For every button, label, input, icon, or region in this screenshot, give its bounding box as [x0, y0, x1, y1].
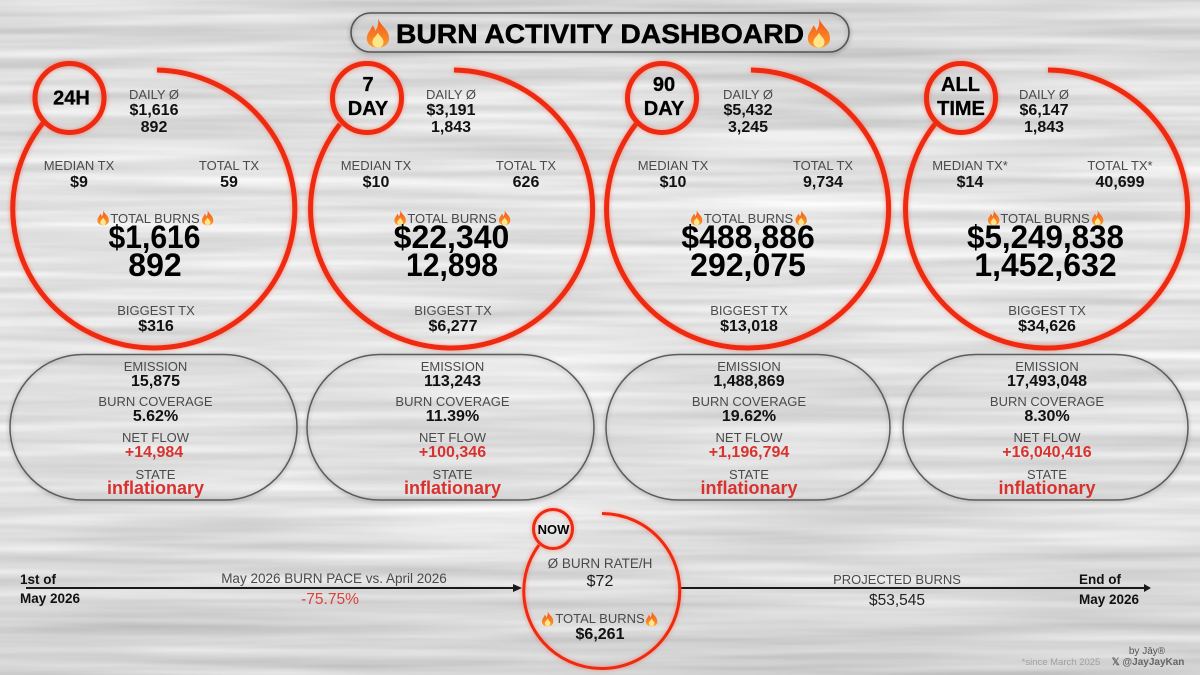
- panel: 90 day supply: 19.62%: [722, 408, 776, 425]
- panel: 90 day supply: EMISSION: [717, 359, 781, 374]
- panel: all time supply: +16,040,416: [1002, 444, 1092, 461]
- stat: biggest tx: $13,018: [720, 318, 778, 335]
- timeline end label: May 2026: [1079, 592, 1140, 607]
- stat: total burns: [394, 210, 510, 283]
- stat: median tx: $10: [363, 174, 389, 191]
- panel: all time burns: [906, 64, 1188, 348]
- credit: [1112, 646, 1184, 668]
- stat: biggest tx: BIGGEST TX: [414, 303, 492, 318]
- stat: daily average: $3,191: [427, 102, 476, 119]
- panel: all time supply: STATE: [1027, 467, 1067, 482]
- timeline end label: [1079, 572, 1140, 607]
- panel: all time supply: 8.30%: [1024, 408, 1070, 425]
- stat: total tx: 9,734: [803, 174, 843, 191]
- stat: total tx: TOTAL TX: [793, 158, 853, 173]
- stat: biggest tx: BIGGEST TX: [117, 303, 195, 318]
- footnote: *since March 2025: [1022, 657, 1100, 668]
- badge: 7 day: [332, 64, 402, 132]
- stat: total burns: $1,616: [108, 219, 200, 255]
- panel: 90 day supply: inflationary: [700, 478, 798, 498]
- panel: all time supply: EMISSION: [1015, 359, 1079, 374]
- timeline start label: [20, 572, 81, 606]
- stat: burn rate: Ø BURN RATE/H: [548, 556, 652, 571]
- stat: daily average: DAILY Ø: [426, 87, 476, 102]
- panel: 24H supply: +14,984: [125, 444, 183, 461]
- badge: 90 day: [628, 64, 696, 132]
- badge: 7 day: DAY: [348, 98, 389, 120]
- badge: 7 day: 7: [362, 74, 374, 96]
- stat: median tx: [44, 158, 115, 191]
- stat: total tx: [496, 158, 556, 191]
- stat: daily average: $1,616: [130, 102, 179, 119]
- stat: total burns: TOTAL BURNS: [1000, 211, 1090, 226]
- burn pace comparison: -75.75%: [301, 591, 359, 608]
- badge: 24H: 24H: [53, 88, 90, 110]
- panel: 90 day supply: 1,488,869: [713, 373, 785, 390]
- stat: daily average: DAILY Ø: [723, 87, 773, 102]
- stat: total burns: 1,452,632: [974, 247, 1117, 283]
- panel: 7 day supply: 11.39%: [426, 408, 479, 425]
- credit: 𝕏 @JayJayKan: [1112, 657, 1184, 668]
- stat: total burns: $5,249,838: [967, 219, 1124, 255]
- stat: total burns: $6,261: [576, 626, 625, 643]
- ring: now: [524, 514, 680, 668]
- stat: daily average: DAILY Ø: [129, 87, 179, 102]
- stat: biggest tx: [117, 303, 195, 335]
- timeline start label: May 2026: [20, 591, 81, 606]
- panel: 24H supply: STATE: [136, 467, 176, 482]
- stat: total burns: [681, 210, 815, 283]
- stat: total tx: [793, 158, 853, 191]
- stat: daily average: $5,432: [724, 102, 773, 119]
- stat: total burns: [97, 210, 213, 283]
- projected burns: [833, 572, 961, 609]
- panel: 7 day supply: 113,243: [424, 373, 481, 390]
- stat: biggest tx: $34,626: [1018, 318, 1076, 335]
- stat: total burns: 892: [128, 247, 182, 283]
- badge: now: [534, 510, 572, 548]
- stat: total burns: [542, 611, 657, 643]
- panel: 90 day supply: NET FLOW: [716, 430, 783, 445]
- burn pace comparison: May 2026 BURN PACE vs. April 2026: [221, 571, 447, 586]
- panel: 7 day supply: +100,346: [419, 444, 486, 461]
- panel: 24H supply: NET FLOW: [122, 430, 190, 445]
- stat: biggest tx: $6,277: [429, 318, 478, 335]
- ring: 7 day: [311, 70, 593, 348]
- panel: all time supply: NET FLOW: [1014, 430, 1081, 445]
- credit: by Jāy®: [1129, 646, 1166, 657]
- panel: 24H supply: 5.62%: [133, 408, 178, 425]
- timeline arrow: left segment: [26, 584, 522, 592]
- title: [351, 13, 849, 52]
- panel: 24H burns: [13, 64, 295, 348]
- stat: biggest tx: [414, 303, 492, 335]
- title: BURN ACTIVITY DASHBOARD: [396, 19, 804, 49]
- panel: all time supply: inflationary: [998, 478, 1096, 498]
- stat: total burns: TOTAL BURNS: [110, 211, 200, 226]
- ring: 90 day: [607, 70, 889, 348]
- panel: 24H supply: BURN COVERAGE: [98, 394, 213, 409]
- badge: all time: ALL: [941, 74, 980, 96]
- panel: 7 day supply: BURN COVERAGE: [395, 394, 510, 409]
- stat: daily average: 1,843: [431, 119, 471, 136]
- stat: biggest tx: BIGGEST TX: [1008, 303, 1086, 318]
- stat: median tx: MEDIAN TX: [341, 158, 412, 173]
- stat: biggest tx: BIGGEST TX: [710, 303, 788, 318]
- stat: daily average: 3,245: [728, 119, 768, 136]
- stat: median tx: $10: [660, 174, 686, 191]
- stat: median tx: MEDIAN TX*: [932, 158, 1008, 173]
- stat: daily average: [1019, 87, 1069, 136]
- stat: daily average: $6,147: [1020, 102, 1069, 119]
- stat: total tx: 626: [513, 174, 539, 191]
- panel: 7 day supply: NET FLOW: [419, 430, 487, 445]
- stat: median tx: [638, 158, 709, 191]
- stat: total burns: $488,886: [681, 219, 815, 255]
- panel: 90 day supply: [606, 354, 890, 500]
- badge: 90 day: 90: [653, 74, 675, 96]
- stat: daily average: [129, 87, 179, 136]
- badge: all time: [926, 64, 996, 132]
- badge: now: NOW: [538, 522, 570, 537]
- panel: 90 day supply: STATE: [729, 467, 769, 482]
- panel: 24H supply: [10, 354, 297, 500]
- burn pace comparison: [221, 571, 447, 608]
- panel: 24H supply: EMISSION: [124, 359, 187, 374]
- stat: total burns: [967, 210, 1124, 283]
- stat: total tx: 40,699: [1096, 174, 1145, 191]
- stat: total tx: TOTAL TX: [496, 158, 556, 173]
- stat: burn rate: $72: [587, 573, 613, 590]
- stat: total burns: TOTAL BURNS: [407, 211, 497, 226]
- stat: median tx: [341, 158, 412, 191]
- projected burns: $53,545: [869, 592, 925, 609]
- stat: median tx: MEDIAN TX: [44, 158, 115, 173]
- panel: 24H supply: 15,875: [131, 373, 180, 390]
- stat: daily average: [426, 87, 476, 136]
- stat: total tx: 59: [220, 174, 238, 191]
- timeline arrow: right segment: [681, 584, 1151, 592]
- stat: biggest tx: [1008, 303, 1086, 335]
- stat: total tx: TOTAL TX*: [1087, 158, 1153, 173]
- stat: total tx: [199, 158, 259, 191]
- stat: daily average: DAILY Ø: [1019, 87, 1069, 102]
- badge: 90 day: DAY: [644, 98, 685, 120]
- ring: 24H: [13, 70, 295, 348]
- stat: biggest tx: $316: [138, 318, 174, 335]
- stat: median tx: [932, 158, 1008, 191]
- projected burns: PROJECTED BURNS: [833, 572, 961, 587]
- stat: median tx: MEDIAN TX: [638, 158, 709, 173]
- stat: daily average: 1,843: [1024, 119, 1064, 136]
- panel: 7 day supply: STATE: [433, 467, 473, 482]
- ring: all time: [906, 70, 1188, 348]
- panel: 7 day supply: EMISSION: [421, 359, 484, 374]
- panel: 7 day burns: [311, 64, 593, 348]
- panel: 90 day supply: +1,196,794: [709, 444, 789, 461]
- panel: 24H supply: inflationary: [107, 478, 204, 498]
- panel: now: [524, 510, 680, 668]
- stat: total burns: 292,075: [690, 247, 806, 283]
- stat: total burns: $22,340: [394, 219, 509, 255]
- stat: daily average: [723, 87, 773, 136]
- panel: all time supply: 17,493,048: [1007, 373, 1087, 390]
- stat: median tx: $9: [70, 174, 88, 191]
- panel: 90 day supply: BURN COVERAGE: [692, 394, 806, 409]
- stat: total burns: 12,898: [406, 247, 498, 283]
- panel: all time supply: [903, 354, 1188, 500]
- timeline start label: 1st of: [20, 572, 57, 587]
- panel: 90 day burns: [607, 64, 889, 348]
- stat: total burns: TOTAL BURNS: [555, 611, 645, 626]
- stat: median tx: $14: [957, 174, 983, 191]
- badge: 24H: [35, 64, 104, 132]
- stat: burn rate: [548, 556, 652, 590]
- panel: 7 day supply: inflationary: [404, 478, 501, 498]
- panel: all time supply: BURN COVERAGE: [990, 394, 1104, 409]
- stat: biggest tx: [710, 303, 788, 335]
- stat: total tx: TOTAL TX: [199, 158, 259, 173]
- timeline end label: End of: [1079, 572, 1121, 587]
- stat: total burns: TOTAL BURNS: [704, 211, 793, 226]
- stat: daily average: 892: [141, 119, 167, 136]
- panel: 7 day supply: [307, 354, 594, 500]
- stat: total tx: [1087, 158, 1153, 191]
- badge: all time: TIME: [937, 98, 985, 120]
